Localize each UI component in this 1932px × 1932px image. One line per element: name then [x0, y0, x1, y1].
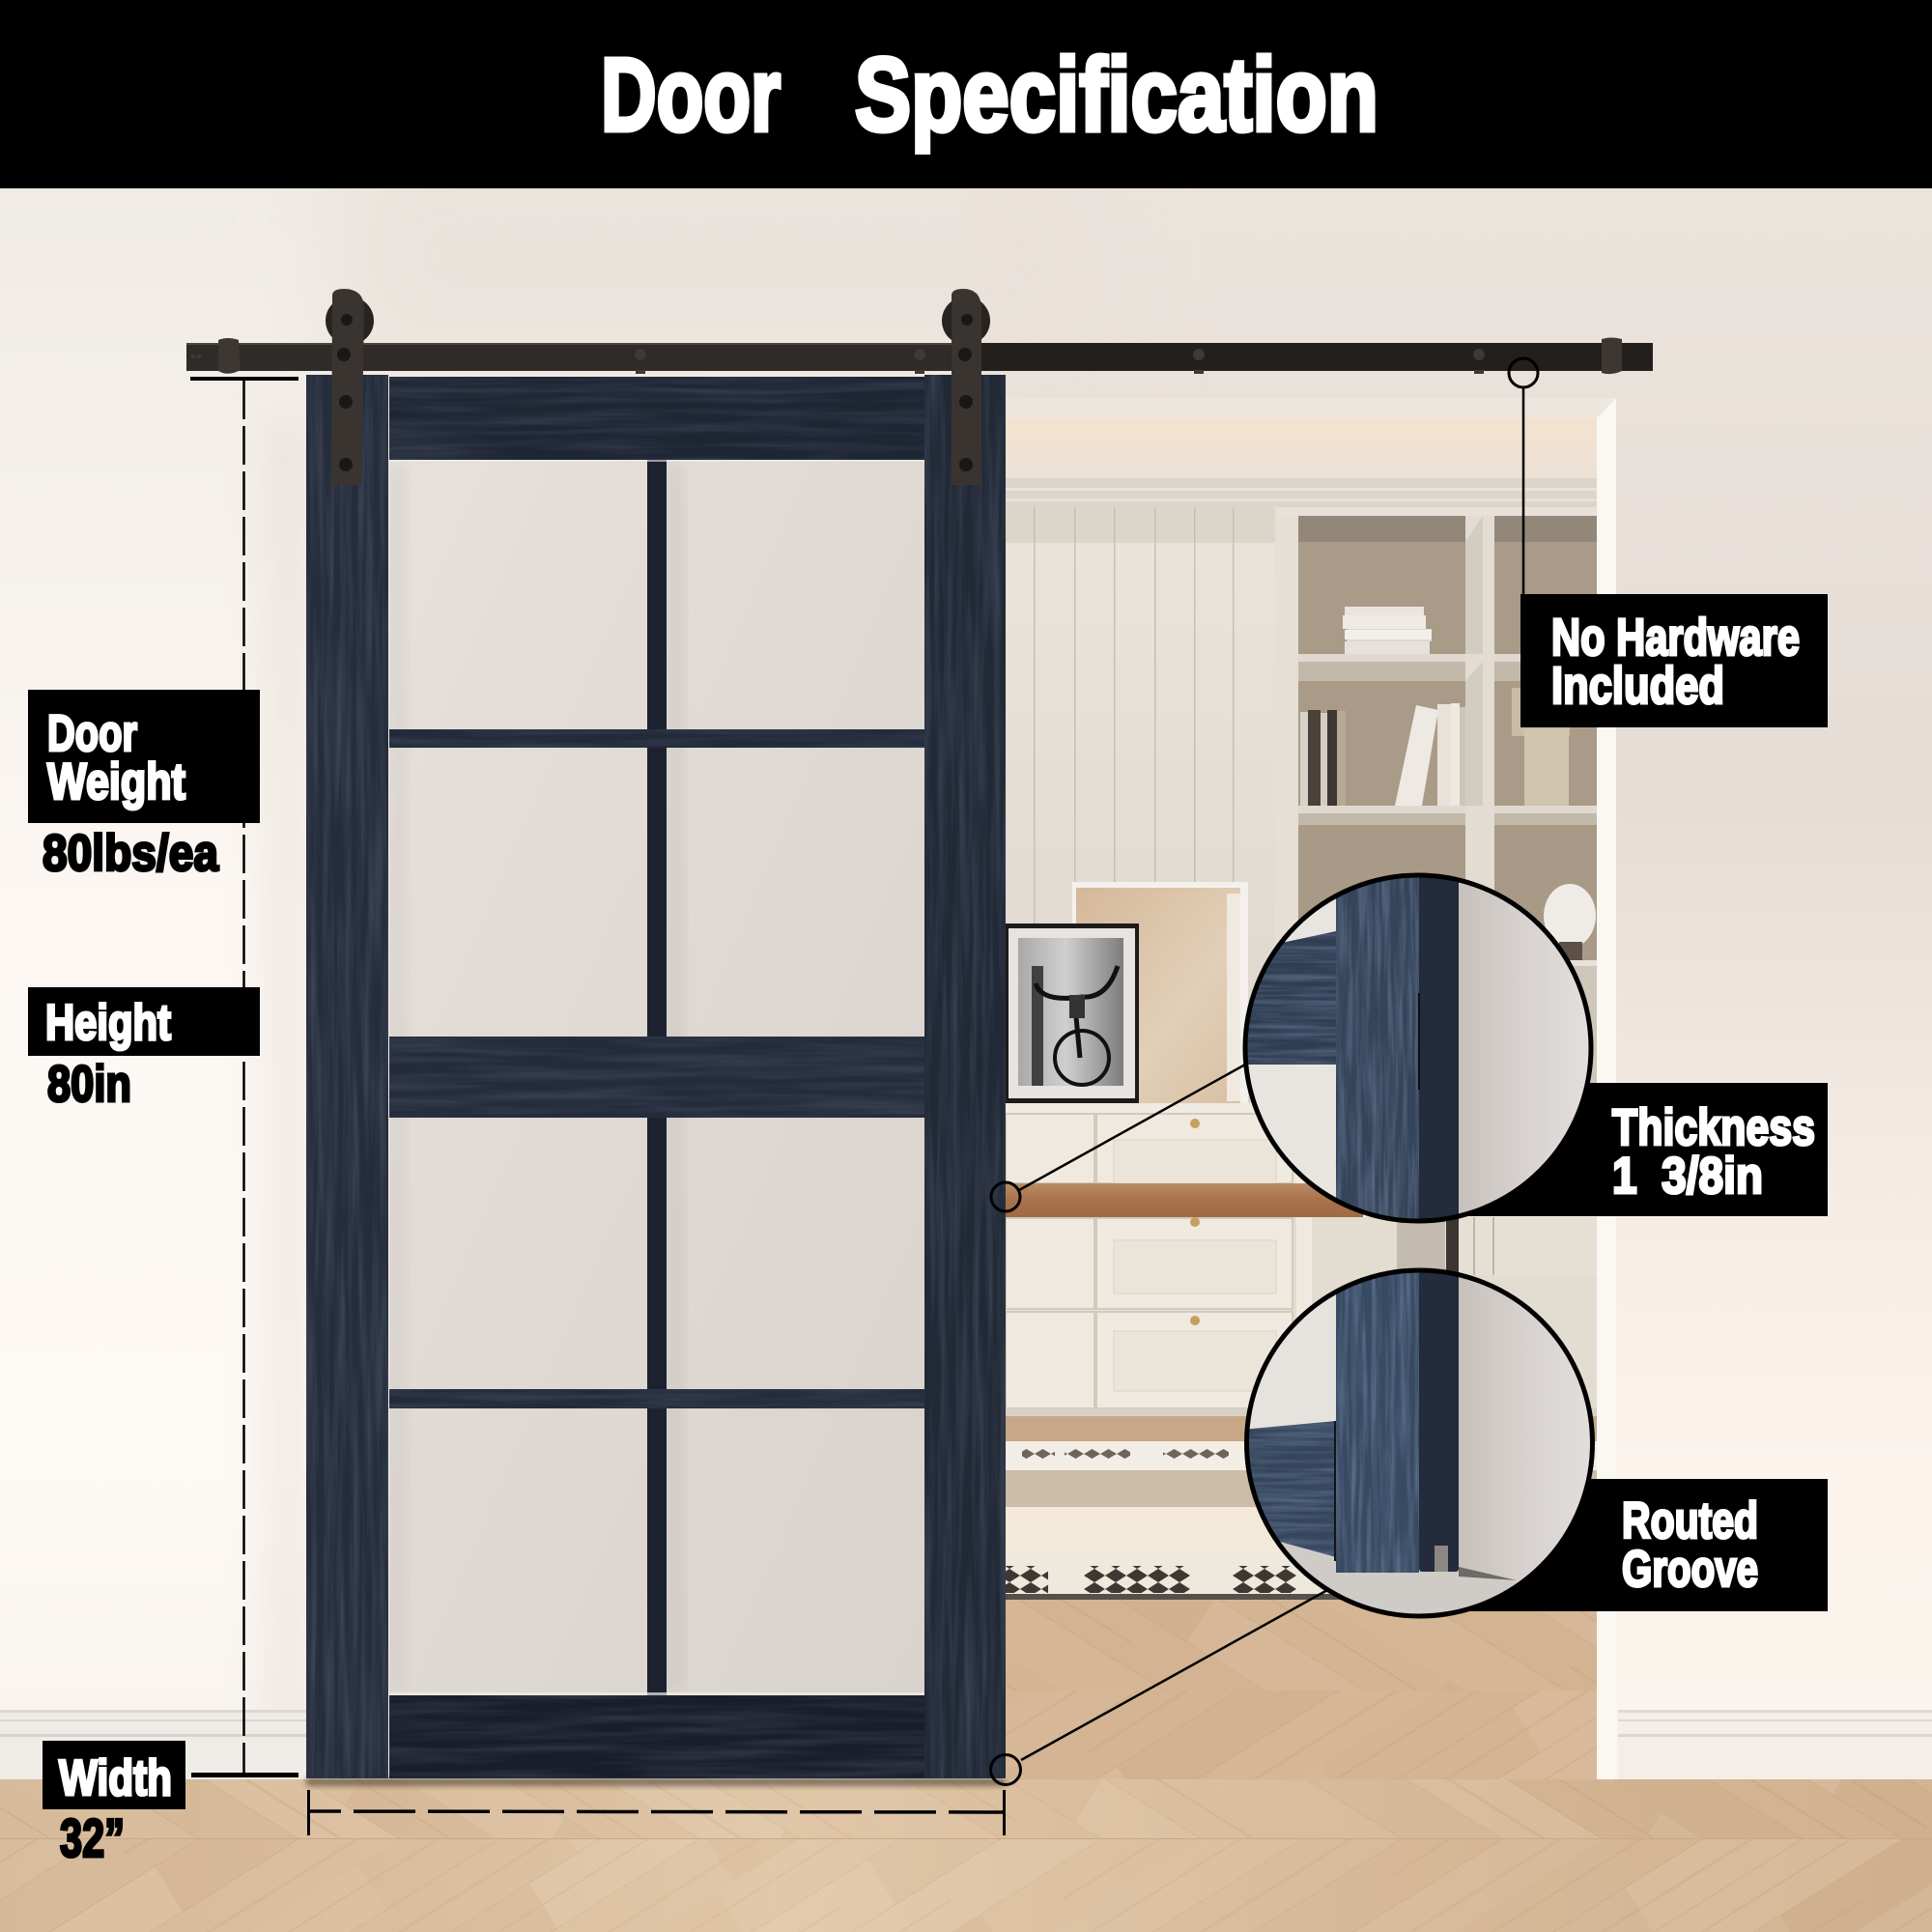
callout: no hardware included: No Hardware — [1551, 609, 1800, 667]
interior floor and rug — [1006, 1416, 1597, 1779]
value: height: 80in — [47, 1056, 131, 1113]
callout: no hardware included — [1520, 594, 1828, 727]
doorway trim — [1006, 398, 1616, 1779]
books and vase — [1300, 607, 1596, 960]
detail circle: routed groove — [1241, 1265, 1604, 1623]
callout: no hardware pointer — [1509, 358, 1538, 595]
label: height — [28, 987, 260, 1056]
vertical muntin — [647, 459, 667, 1695]
title bar — [0, 0, 1932, 188]
middle rail — [389, 1037, 924, 1118]
title: Specification — [855, 36, 1378, 153]
framed bicycle photo — [1006, 923, 1139, 1103]
callout: thickness box — [1459, 1083, 1828, 1216]
callout: thickness box: Thickness — [1612, 1099, 1815, 1156]
top rail — [389, 377, 924, 460]
callout: routed groove box: Routed — [1622, 1492, 1758, 1549]
doorway interior — [1006, 398, 1597, 1779]
label: width — [43, 1741, 185, 1809]
pointer: thickness detail — [991, 1065, 1245, 1211]
barn door — [306, 375, 1006, 1778]
title: Door — [601, 36, 781, 153]
floor — [0, 1777, 1932, 1932]
right stile — [924, 375, 1006, 1778]
value: door weight: 80lbs/ea — [43, 825, 218, 882]
doorway header and ceiling glow — [1006, 418, 1597, 507]
glass panels — [389, 459, 924, 1695]
detail circle: thickness — [1241, 869, 1594, 1227]
framed art — [1072, 882, 1248, 1104]
title — [601, 36, 1378, 153]
bottom rail — [389, 1695, 924, 1778]
label: door weight: Weight — [47, 753, 185, 810]
baseboard — [0, 1710, 1932, 1779]
stop blocks — [218, 338, 1622, 374]
label: height: Height — [45, 995, 171, 1051]
width dimension line — [307, 1790, 1006, 1835]
callout: thickness box: 1 3/8in — [1612, 1148, 1763, 1205]
rail bolts — [191, 349, 1485, 374]
value: width: 32” — [60, 1807, 125, 1868]
right hanger — [942, 289, 990, 485]
track rail — [186, 343, 1653, 371]
paneled wall — [1006, 507, 1275, 1106]
left stile — [306, 375, 388, 1778]
horizontal muntins — [389, 729, 924, 1408]
left hanger — [326, 289, 374, 485]
callout: routed groove box: Groove — [1622, 1541, 1758, 1598]
label: width: Width — [59, 1750, 172, 1806]
pointer: groove detail — [991, 1589, 1329, 1785]
label: door weight — [28, 690, 260, 823]
barn door rail and hardware — [186, 289, 1653, 485]
cabinets — [1006, 1103, 1597, 1420]
height dimension line — [190, 377, 298, 1777]
callout: no hardware included: Included — [1551, 657, 1724, 715]
callout: routed groove box — [1459, 1479, 1828, 1611]
label: door weight: Door — [47, 705, 137, 762]
bookshelf — [1298, 516, 1597, 1083]
